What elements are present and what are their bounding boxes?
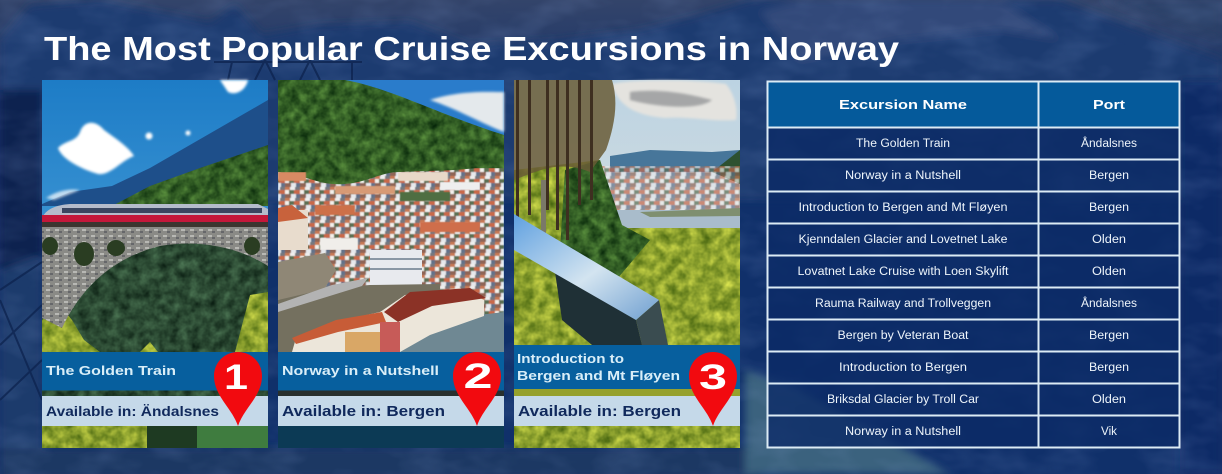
band: excursion name: Bergen and Mt Fløyen [517, 368, 680, 383]
table rows: Åndalsnes [1081, 137, 1137, 150]
table rows: Åndalsnes [1081, 297, 1137, 310]
band: port availability: Available in: Bergen [282, 404, 445, 420]
band: excursion name: Norway in a Nutshell [282, 363, 439, 378]
band: excursion name [514, 345, 740, 389]
table rows: Bergen by Veteran Boat [838, 330, 969, 342]
table rows [798, 137, 1137, 438]
table rows: Norway in a Nutshell [845, 170, 961, 182]
band: excursion name: The Golden Train [46, 363, 176, 378]
map pin 2: 2 [464, 357, 492, 396]
map pin 1: 1 [224, 358, 248, 397]
card 1: The Golden Train [42, 80, 268, 448]
table rows: Introduction to Bergen and Mt Fløyen [798, 202, 1008, 214]
table rows: Vik [1101, 426, 1117, 438]
map pin 1 [214, 352, 262, 426]
table: excursions and ports [767, 81, 1180, 448]
table rows: Norway in a Nutshell [845, 426, 961, 438]
table rows: Bergen [1089, 330, 1129, 342]
photo: train on stone bridge [42, 80, 268, 448]
table rows: Introduction to Bergen [839, 362, 967, 374]
table rows: Olden [1092, 234, 1126, 246]
band: excursion name [278, 352, 504, 390]
table header: Excursion Name [839, 97, 967, 112]
band: excursion name: Introduction to [517, 351, 624, 366]
band: port availability: Available in: Ändalsnes [46, 404, 219, 419]
table rows: Kjenndalen Glacier and Lovetnet Lake [798, 234, 1008, 246]
table rows: Bergen [1089, 362, 1129, 374]
table header: Port [1093, 97, 1126, 112]
table rows: Lovatnet Lake Cruise with Loen Skylift [798, 266, 1009, 278]
table grid [767, 81, 1180, 448]
map pin 3 [689, 352, 737, 426]
map pin 3: 3 [699, 358, 727, 397]
card 2: Norway in a Nutshell [278, 80, 504, 448]
band: port availability [278, 396, 504, 426]
band: port availability: Available in: Bergen [518, 404, 681, 420]
table rows: The Golden Train [856, 138, 950, 150]
table body background [767, 127, 1180, 447]
title: The Most Popular Cruise Excursions in Norway [44, 30, 900, 67]
card 3: Introduction to Bergen and Mt Fløyen [514, 80, 740, 448]
band: port availability [514, 396, 740, 426]
table rows: Bergen [1089, 170, 1129, 182]
table rows: Bergen [1089, 202, 1129, 214]
band: excursion name [42, 352, 268, 390]
band: port availability [42, 396, 268, 426]
photo: Bergen town and wharf [278, 80, 504, 448]
table rows: Olden [1092, 266, 1126, 278]
table rows: Briksdal Glacier by Troll Car [827, 394, 979, 406]
table header [767, 81, 1180, 127]
table rows: Rauma Railway and Trollveggen [815, 298, 991, 310]
map pin 2 [453, 352, 501, 426]
photo: funicular above Bergen [514, 80, 740, 448]
table rows: Olden [1092, 394, 1126, 406]
